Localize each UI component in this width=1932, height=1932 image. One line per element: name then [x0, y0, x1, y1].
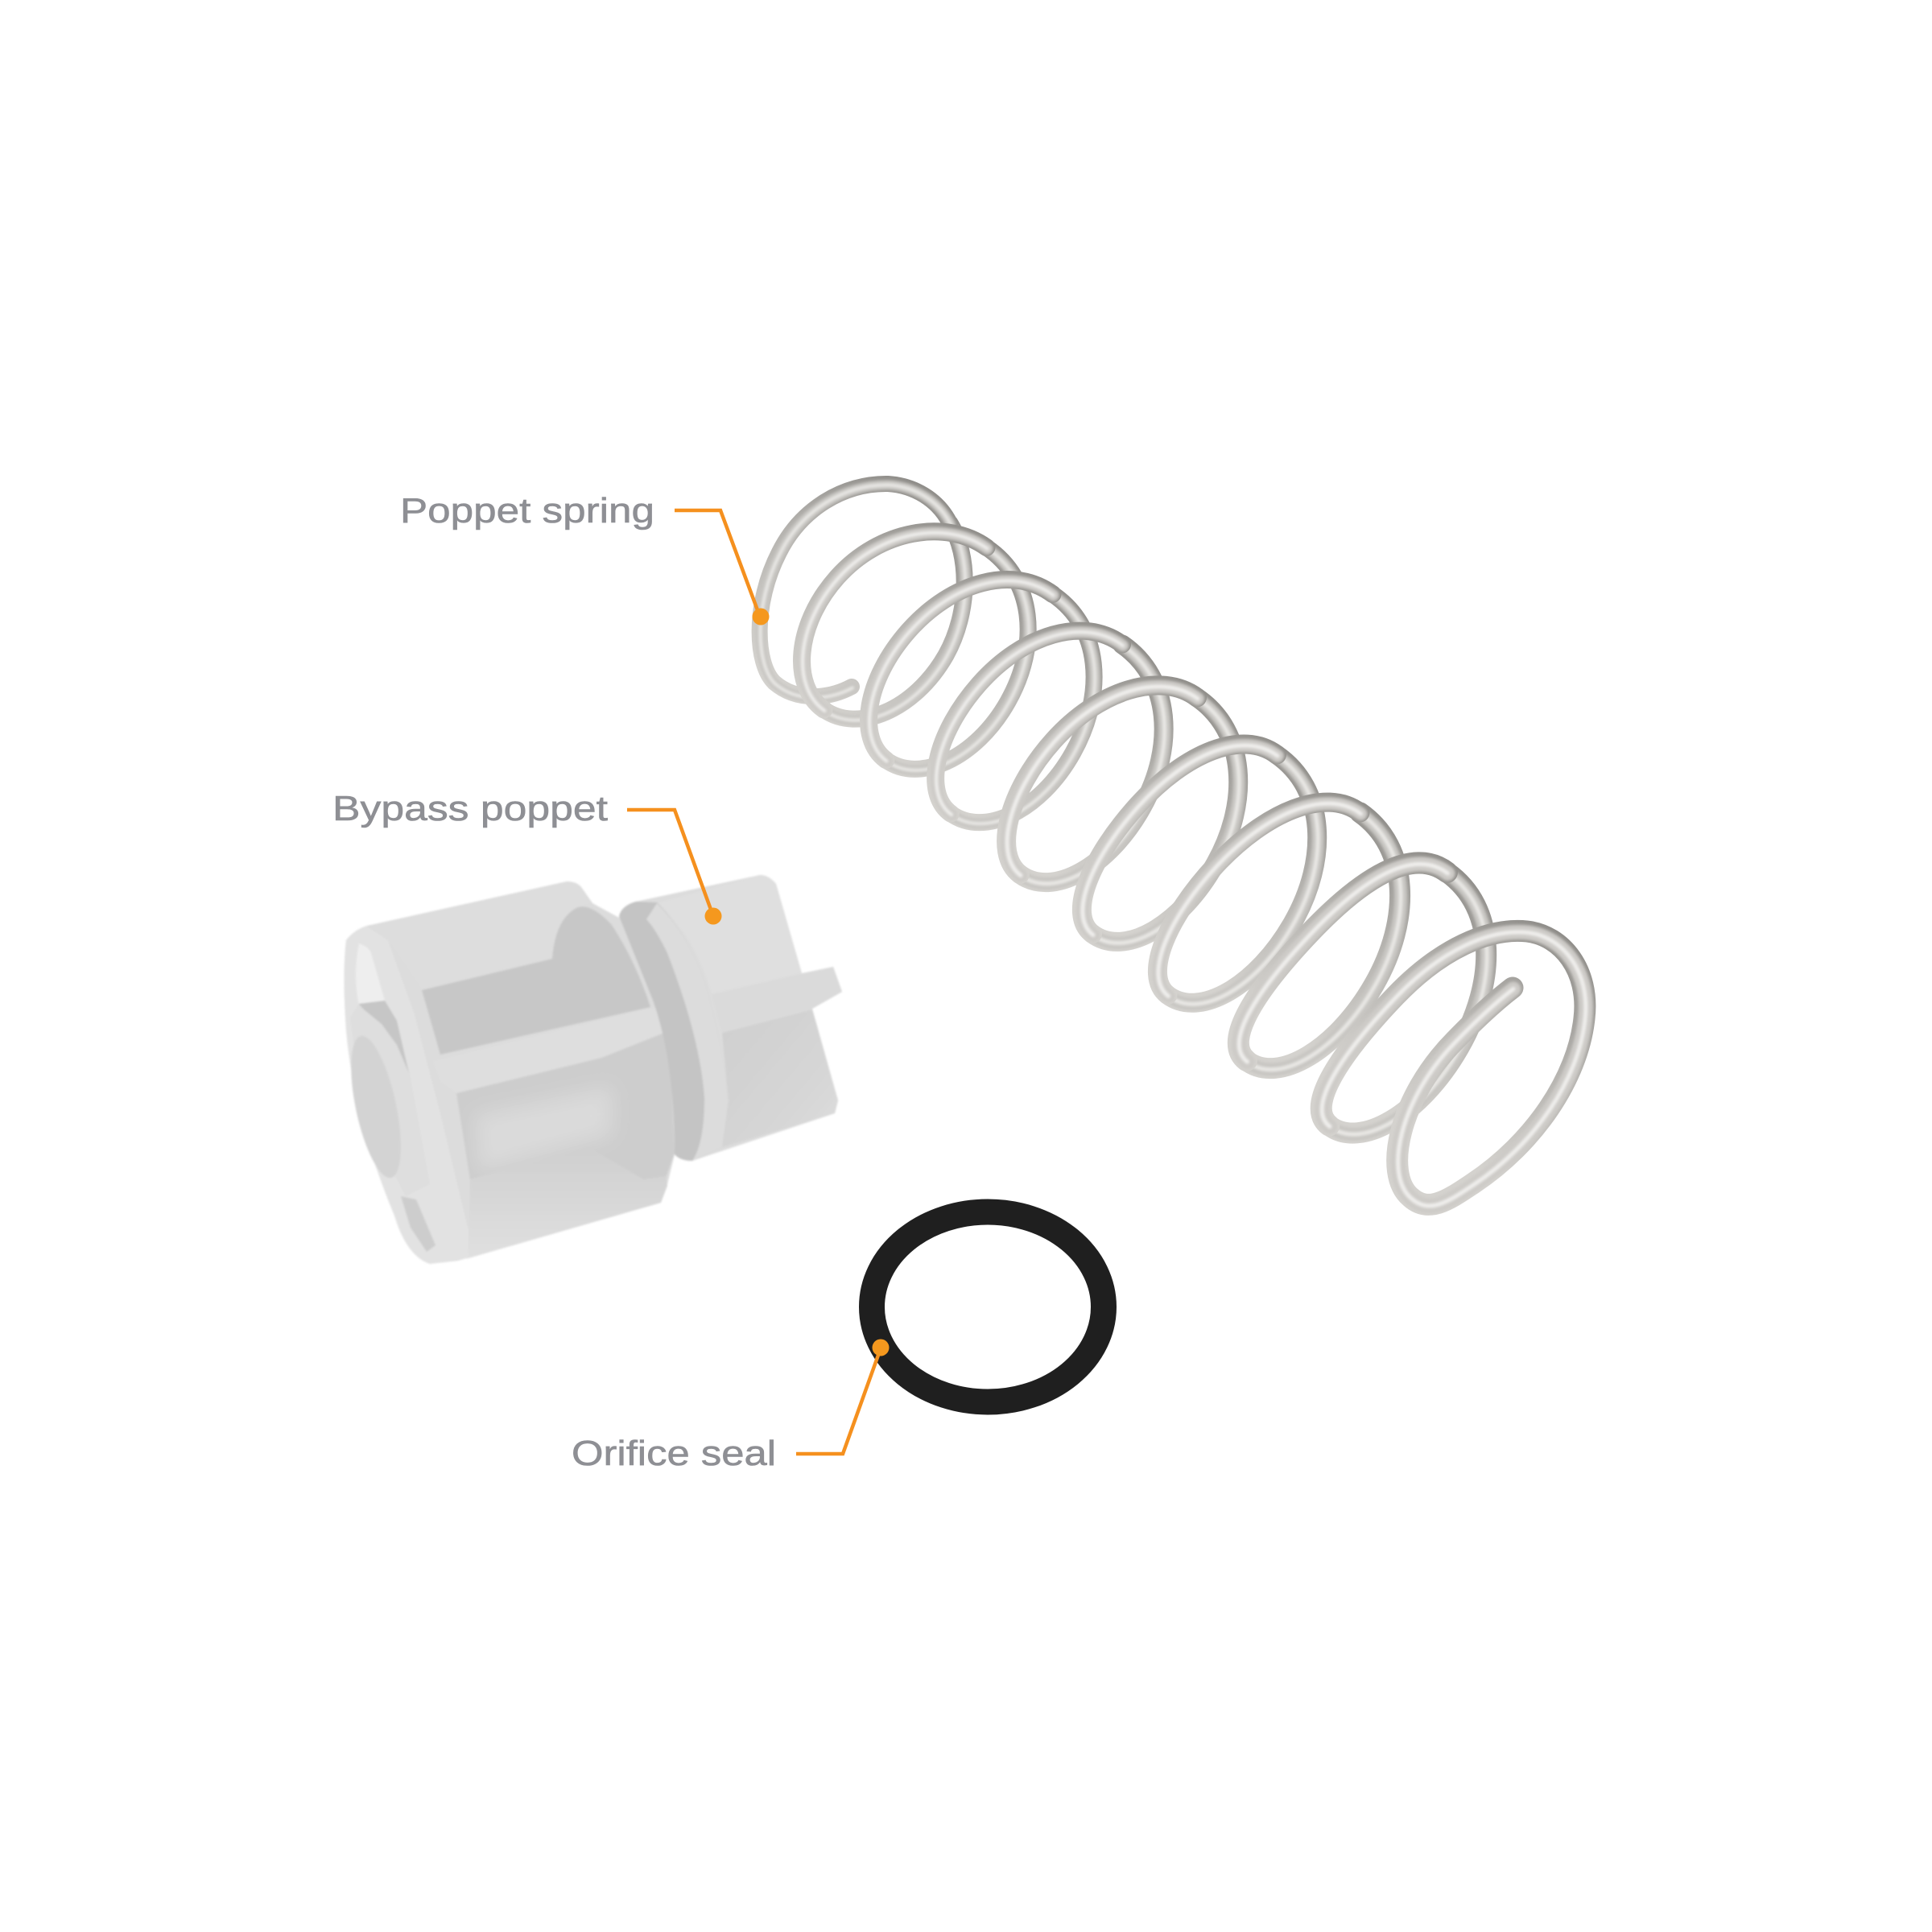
label: orifice seal: Orifice seal: [572, 1434, 776, 1473]
spring: front arcs: [802, 531, 1586, 1206]
poppet: hub top shadow: [359, 1001, 409, 1073]
poppet spring: [760, 484, 1586, 1206]
dot: bypass poppet: [705, 908, 721, 924]
leader: bypass poppet: [627, 810, 713, 916]
callout: bypass poppet: [332, 789, 721, 924]
callout: orifice seal: [572, 1340, 889, 1473]
poppet: lower face shadow: [401, 1196, 436, 1252]
poppet: lower recess: [456, 1033, 675, 1179]
label: bypass poppet: Bypass poppet: [332, 789, 608, 828]
poppet: lower body: [469, 1147, 667, 1258]
poppet: right vane lower: [722, 1009, 838, 1147]
poppet: cross rib: [712, 967, 842, 1033]
poppet: collar ring: [646, 903, 729, 1161]
poppet: upper recess: [422, 906, 650, 1055]
dot: poppet spring: [752, 609, 770, 625]
bypass poppet: [341, 875, 842, 1264]
orifice seal o-ring: [872, 1212, 1104, 1402]
label: poppet spring: Poppet spring: [400, 491, 654, 530]
poppet: lower recess highlight: [475, 1087, 612, 1171]
poppet: collar groove: [619, 902, 729, 1161]
dot: orifice seal: [873, 1340, 889, 1356]
poppet: silhouette: [345, 875, 842, 1264]
leader: orifice seal: [796, 1348, 881, 1454]
poppet: bore: [341, 1032, 411, 1182]
poppet: long rib: [432, 1007, 664, 1093]
poppet: inner face: [356, 943, 385, 1006]
callout: poppet spring: [400, 491, 770, 625]
spring: first coil and free end: [760, 484, 951, 698]
poppet: upper body surface: [367, 881, 592, 990]
poppet: hub: [350, 1001, 430, 1196]
spring: rear arcs: [824, 523, 1487, 1134]
poppet: right vane top: [658, 875, 802, 994]
leader: poppet spring: [675, 510, 760, 617]
poppet: front flange: [345, 926, 469, 1264]
